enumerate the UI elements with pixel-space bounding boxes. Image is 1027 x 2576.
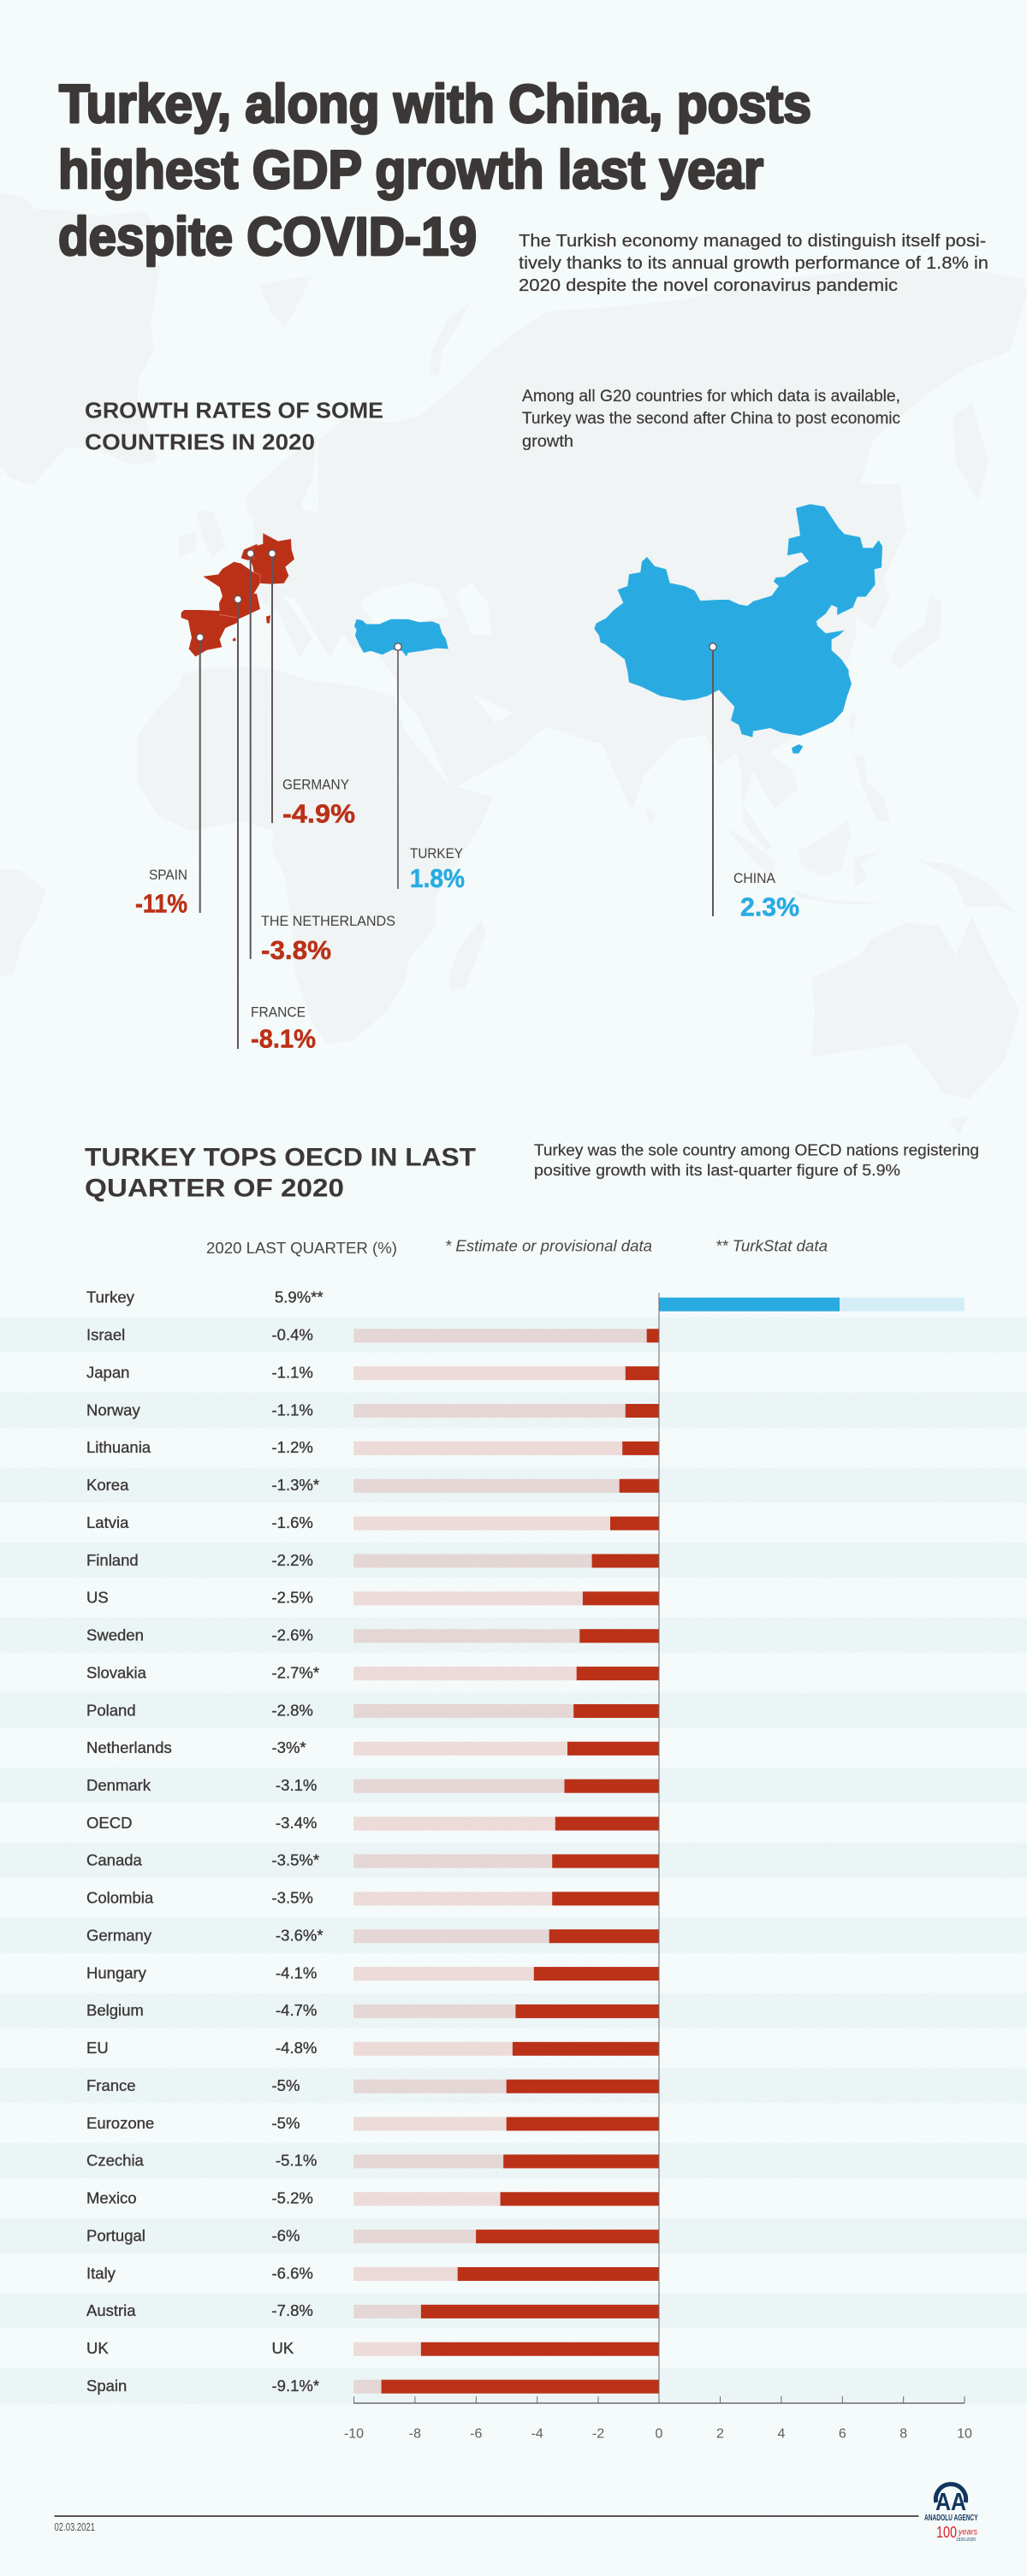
axis tick labels: 4	[777, 2426, 785, 2441]
row: OECD	[86, 1814, 659, 1832]
logo: Anadolu Agency: 100	[936, 2524, 957, 2541]
row: Lithuania: Lithuania	[86, 1438, 151, 1456]
map: caspian sea	[455, 583, 491, 635]
row: Netherlands: -3%*	[272, 1738, 306, 1756]
text: OECD note: Turkey was the sole country among OECD nations registering	[534, 1141, 979, 1158]
row: Canada: -3.5%*	[272, 1851, 319, 1869]
row: Japan: -1.1%	[272, 1363, 313, 1381]
map: new guinea	[917, 861, 1015, 913]
row: Eurozone: -5%	[272, 2114, 300, 2132]
heading: turkey tops OECD: QUARTER OF 2020	[85, 1174, 344, 1203]
map: sri lanka	[644, 805, 656, 825]
axis tick labels: -6	[470, 2426, 483, 2441]
row: Czechia: -5.1%	[276, 2152, 317, 2170]
callout: turkey	[395, 643, 465, 893]
callout: germany	[269, 550, 355, 828]
subtitle text: tively thanks to its annual growth performance of 1.8% in	[519, 253, 988, 273]
logo: Anadolu Agency	[924, 2484, 978, 2543]
axis tick labels: 6	[839, 2426, 846, 2441]
country: netherlands	[241, 544, 258, 560]
subtitle text	[519, 231, 988, 295]
country: france	[203, 562, 260, 619]
logo: Anadolu Agency: 1920-2020	[956, 2538, 976, 2543]
axis tick labels: 0	[656, 2426, 663, 2441]
row: OECD: OECD	[86, 1814, 132, 1832]
row: OECD: -3.4%	[276, 1814, 317, 1832]
row: Eurozone: Eurozone	[86, 2114, 154, 2132]
logo: Anadolu Agency: ANADOLU AGENCY	[924, 2513, 978, 2523]
row: Denmark: -3.1%	[276, 1776, 317, 1794]
map: turkey in blue	[354, 619, 448, 656]
legend row: ** TurkStat data	[715, 1237, 828, 1254]
callout: turkey: TURKEY	[410, 845, 463, 862]
callout: germany: GERMANY	[282, 777, 349, 792]
title: highest GDP growth last year	[58, 140, 763, 200]
row: Latvia	[86, 1513, 659, 1531]
title: Turkey, along with China, posts	[59, 74, 811, 134]
row: Portugal	[0, 2218, 1027, 2253]
axis tick labels: 2	[716, 2426, 724, 2441]
map: borneo	[798, 821, 851, 877]
title	[58, 74, 811, 267]
axis tick labels: -4	[531, 2426, 543, 2441]
callout: france	[234, 595, 316, 1054]
text: G20 note: Among all G20 countries for which data is available,	[522, 388, 900, 406]
row: Israel: -0.4%	[272, 1326, 313, 1344]
callout: france: -8.1%	[251, 1023, 316, 1054]
row: Spain: Spain	[86, 2377, 127, 2395]
row: Czechia	[0, 2143, 1027, 2178]
row: Poland: Poland	[86, 1701, 136, 1719]
callout: turkey: 1.8%	[410, 863, 465, 893]
map: south america tip	[0, 868, 46, 977]
map: european countries in red	[181, 533, 294, 656]
row: Norway	[0, 1393, 1027, 1428]
callout: the netherlands	[246, 550, 395, 965]
title: despite COVID-19	[58, 207, 477, 267]
map: tasmania	[949, 1116, 969, 1135]
row: Portugal: Portugal	[86, 2226, 145, 2244]
row: Mexico: Mexico	[86, 2189, 137, 2207]
callout: spain: SPAIN	[149, 867, 187, 883]
map: japan	[890, 595, 941, 668]
row: Portugal: -6%	[272, 2226, 300, 2244]
axis tick labels: -10	[344, 2426, 364, 2441]
row: Lithuania: -1.2%	[272, 1438, 313, 1456]
row: EU: EU	[86, 2039, 109, 2057]
map: madagascar	[448, 920, 486, 990]
callout: spain	[135, 634, 204, 919]
callout: france: FRANCE	[251, 1004, 306, 1020]
map: australia	[811, 916, 1019, 1099]
row: France: -5%	[272, 2076, 300, 2094]
row: Denmark	[0, 1768, 1027, 1803]
subtitle text: The Turkish economy managed to distinguish itself posi-	[519, 231, 986, 251]
heading: turkey tops OECD: TURKEY TOPS OECD IN LAST	[85, 1143, 476, 1172]
date: 02.03.2021	[55, 2521, 95, 2533]
row: US	[86, 1589, 659, 1607]
row: Turkey: 5.9%**	[275, 1288, 324, 1306]
row: Germany: -3.6%*	[276, 1926, 324, 1944]
row: Hungary	[86, 1963, 659, 1981]
row: Italy: -6.6%	[272, 2264, 313, 2282]
row: Hungary: -4.1%	[276, 1963, 317, 1981]
row: Poland	[0, 1693, 1027, 1728]
row: Poland: -2.8%	[272, 1701, 313, 1719]
row: Germany: Germany	[86, 1926, 152, 1944]
text: OECD note	[534, 1141, 979, 1179]
row: US: US	[86, 1589, 109, 1607]
callout: the netherlands: THE NETHERLANDS	[261, 913, 395, 929]
row: Korea: Korea	[86, 1476, 129, 1494]
heading: growth rates	[85, 397, 383, 455]
row: Finland: Finland	[86, 1551, 139, 1569]
row: Slovakia: -2.7%*	[272, 1663, 319, 1681]
row: UK: UK	[272, 2339, 294, 2357]
row: Latvia: Latvia	[86, 1513, 129, 1531]
row: Norway: -1.1%	[272, 1401, 313, 1418]
row: Japan	[86, 1363, 659, 1381]
map: sumatra	[727, 828, 775, 877]
logo: Anadolu Agency: AA	[935, 2489, 966, 2516]
row: Czechia: Czechia	[86, 2152, 145, 2170]
text: OECD note: positive growth with its last-quarter figure of 5.9%	[534, 1161, 900, 1179]
heading: growth rates: GROWTH RATES OF SOME	[85, 397, 383, 423]
map: arctic islands	[258, 275, 312, 328]
row: US: -2.5%	[272, 1589, 313, 1607]
row: Sweden	[0, 1618, 1027, 1653]
hainan	[792, 744, 803, 754]
row: Austria: -7.8%	[272, 2301, 313, 2319]
footer rule	[55, 2515, 919, 2517]
map: persian gulf	[472, 693, 514, 723]
row: Turkey	[86, 1288, 965, 1312]
chart axis	[353, 1293, 965, 2403]
row: France: France	[86, 2076, 136, 2094]
axis tick labels: -8	[409, 2426, 421, 2441]
row: Colombia: -3.5%	[272, 1889, 313, 1907]
row: Finland	[0, 1543, 1027, 1578]
row: Latvia: -1.6%	[272, 1513, 313, 1531]
row: Italy: Italy	[86, 2264, 116, 2282]
row: Japan: Japan	[86, 1363, 129, 1381]
map: china in blue	[594, 504, 882, 754]
row: Lithuania	[86, 1438, 659, 1456]
legend row	[206, 1237, 828, 1257]
bar chart	[0, 1288, 1027, 2441]
row: Belgium	[0, 1993, 1027, 2028]
row: Eurozone	[86, 2114, 659, 2132]
row: Hungary: Hungary	[86, 1963, 147, 1981]
map: novaya zemlya	[429, 301, 472, 376]
row: Sweden: Sweden	[86, 1626, 144, 1644]
map: ireland	[179, 530, 197, 557]
map: africa	[138, 667, 493, 1044]
callout: spain: -11%	[135, 888, 187, 919]
row: UK	[86, 2339, 659, 2357]
row: Slovakia: Slovakia	[86, 1663, 147, 1681]
map: great britain	[197, 511, 226, 557]
row: Israel	[0, 1318, 1027, 1353]
row: Mexico	[86, 2189, 659, 2207]
row: Belgium: -4.7%	[276, 2001, 317, 2019]
row: EU	[86, 2039, 659, 2057]
row: Spain	[0, 2368, 1027, 2403]
row: Netherlands: Netherlands	[86, 1738, 172, 1756]
logo: Anadolu Agency: years	[958, 2528, 977, 2538]
row: EU: -4.8%	[276, 2039, 317, 2057]
map: scandinavia	[246, 436, 317, 524]
map: taiwan	[849, 714, 857, 731]
text: G20 note: growth	[522, 433, 573, 451]
text: G20 note	[522, 388, 900, 451]
row: France	[0, 2068, 1027, 2103]
row: Spain: -9.1%*	[272, 2377, 319, 2395]
map: greenland	[0, 193, 161, 485]
callout: china: 2.3%	[740, 891, 799, 922]
callout: the netherlands: -3.8%	[261, 935, 331, 965]
row: Mexico: -5.2%	[272, 2189, 313, 2207]
row: Finland: -2.2%	[272, 1551, 313, 1569]
row: Italy	[86, 2264, 659, 2282]
text: G20 note: Turkey was the second after China to post economic	[522, 410, 900, 428]
row: Slovakia	[86, 1663, 659, 1681]
map: kamchatka	[953, 403, 988, 500]
legend row: 2020 LAST QUARTER (%)	[206, 1240, 397, 1257]
country: spain	[181, 610, 238, 656]
axis tick labels: 10	[957, 2426, 972, 2441]
row: Denmark: Denmark	[86, 1776, 151, 1794]
row: Colombia	[86, 1889, 659, 1907]
row: Colombia: Colombia	[86, 1889, 154, 1907]
row: Norway: Norway	[86, 1401, 140, 1418]
row: Korea	[0, 1467, 1027, 1502]
row: Turkey: Turkey	[86, 1288, 135, 1306]
callout: china: CHINA	[733, 870, 776, 886]
legend row: * Estimate or provisional data	[445, 1237, 652, 1254]
island: mallorca	[233, 637, 236, 642]
row: UK: UK	[86, 2339, 109, 2357]
map: black sea	[359, 583, 449, 629]
heading: turkey tops OECD	[85, 1143, 476, 1203]
callout: germany: -4.9%	[282, 799, 355, 828]
row: Austria	[0, 2293, 1027, 2328]
row: Netherlands	[86, 1738, 659, 1756]
row: Korea: -1.3%*	[272, 1476, 319, 1494]
row: Canada	[0, 1843, 1027, 1878]
map: java	[792, 890, 890, 904]
island: corsica	[266, 615, 270, 624]
background world map	[0, 193, 1027, 1135]
china mainland	[594, 504, 882, 737]
row: Israel: Israel	[86, 1326, 125, 1344]
heading: growth rates: COUNTRIES IN 2020	[85, 429, 315, 455]
map: oceania and south-east asia islands	[644, 714, 1019, 1135]
row: Belgium: Belgium	[86, 2001, 144, 2019]
subtitle text: 2020 despite the novel coronavirus pandemic	[519, 275, 898, 295]
row: Canada: Canada	[86, 1851, 143, 1869]
row: Austria: Austria	[86, 2301, 136, 2319]
row: Germany	[0, 1918, 1027, 1953]
country: germany	[251, 533, 294, 584]
row: Sweden: -2.6%	[272, 1626, 313, 1644]
axis tick labels: 8	[899, 2426, 907, 2441]
axis tick labels: -2	[592, 2426, 604, 2441]
axis tick labels	[344, 2426, 972, 2441]
map: eurasia	[253, 269, 1027, 851]
map: philippines	[854, 755, 890, 821]
callout: china	[709, 643, 799, 922]
map: sulawesi	[854, 850, 881, 886]
